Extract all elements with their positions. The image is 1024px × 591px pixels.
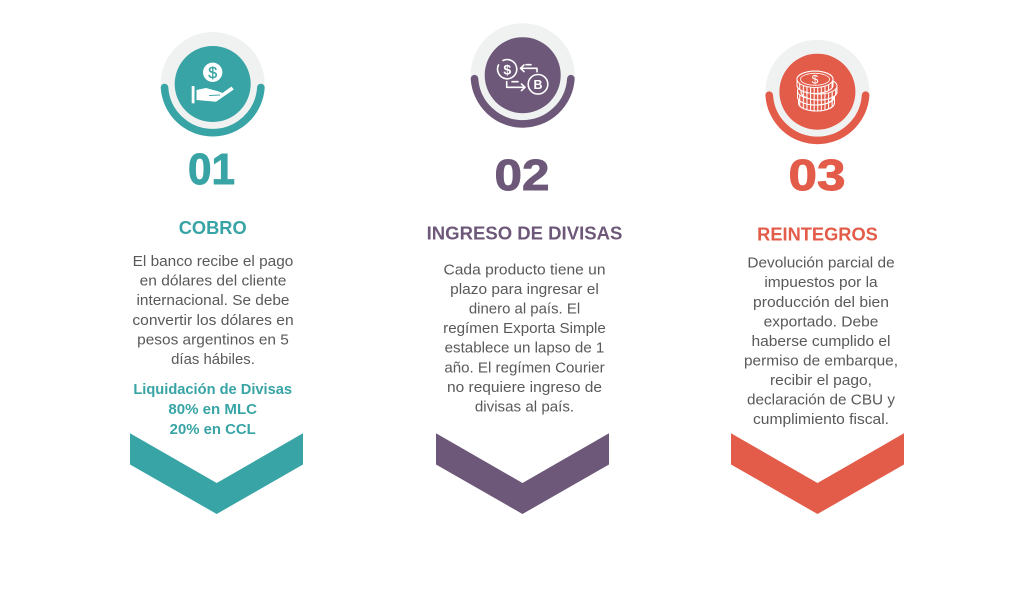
- icon: hand receiving dollar coin: $: [208, 65, 217, 82]
- text block: cobro description: [132, 254, 294, 368]
- text block: ingreso description: establece un lapso de 1: [445, 341, 604, 357]
- text block: ingreso description: regímen Exporta Simple: [443, 321, 606, 337]
- text block: reintegros description: exportado. Debe: [764, 314, 878, 330]
- text block: cobro description: días hábiles.: [171, 352, 255, 368]
- panel: step 02 ingreso de divisas: [427, 23, 622, 514]
- text block: cobro description: en dólares del cliente: [140, 274, 286, 290]
- text block: ingreso description: [443, 262, 606, 416]
- text block: reintegros description: permiso de embarque,: [744, 353, 898, 369]
- text block: ingreso description: no requiere ingreso de: [447, 380, 602, 396]
- callout: liquidación de divisas: 80% en MLC: [168, 402, 258, 418]
- text block: reintegros description: recibir el pago,: [770, 373, 872, 389]
- text block: ingreso description: dinero al país. El: [469, 302, 580, 318]
- icon: hand receiving dollar coin: [161, 32, 265, 136]
- text block: cobro description: internacional. Se debe: [136, 293, 290, 309]
- text block: reintegros description: Devolución parcial de: [747, 256, 895, 272]
- text block: reintegros description: [744, 256, 898, 428]
- arrow: chevron down: [731, 433, 904, 514]
- text block: ingreso description: divisas al país.: [475, 400, 574, 416]
- text block: cobro description: convertir los dólares en: [132, 313, 294, 329]
- icon: currency exchange dollar to bitcoin: B: [533, 78, 543, 92]
- text block: cobro description: pesos argentinos en 5: [137, 332, 289, 348]
- callout: liquidación de divisas: [133, 382, 292, 438]
- text block: reintegros description: cumplimiento fiscal.: [753, 412, 889, 428]
- number 02: 02: [494, 151, 550, 200]
- icon: stack of coins: $: [812, 72, 819, 86]
- number 01: 01: [188, 145, 235, 194]
- text block: reintegros description: producción del bien: [753, 295, 889, 311]
- heading: reintegros: REINTEGROS: [757, 224, 878, 245]
- text block: ingreso description: año. El regímen Courier: [444, 360, 605, 376]
- arrow: chevron down: [436, 433, 609, 514]
- text block: ingreso description: Cada producto tiene un: [444, 262, 606, 278]
- text block: cobro description: El banco recibe el pago: [133, 254, 293, 270]
- text block: ingreso description: plazo para ingresar el: [450, 282, 599, 298]
- heading: cobro: COBRO: [179, 217, 247, 238]
- text block: reintegros description: declaración de CBU y: [747, 392, 896, 408]
- text block: reintegros description: impuestos por la: [764, 275, 879, 291]
- text block: reintegros description: haberse cumplido el: [752, 334, 890, 350]
- icon: currency exchange dollar to bitcoin: [471, 23, 575, 127]
- heading: ingreso de divisas: INGRESO DE DIVISAS: [427, 222, 622, 244]
- icon: stack of coins: [765, 40, 869, 144]
- number 03: 03: [788, 151, 846, 200]
- panel: step 01 cobro: [130, 32, 303, 514]
- callout: liquidación de divisas: Liquidación de Divisas: [133, 382, 292, 398]
- panel: step 03 reintegros: [731, 40, 904, 514]
- callout: liquidación de divisas: 20% en CCL: [170, 422, 256, 438]
- icon: currency exchange dollar to bitcoin: $: [503, 62, 511, 78]
- arrow: chevron down: [130, 433, 303, 514]
